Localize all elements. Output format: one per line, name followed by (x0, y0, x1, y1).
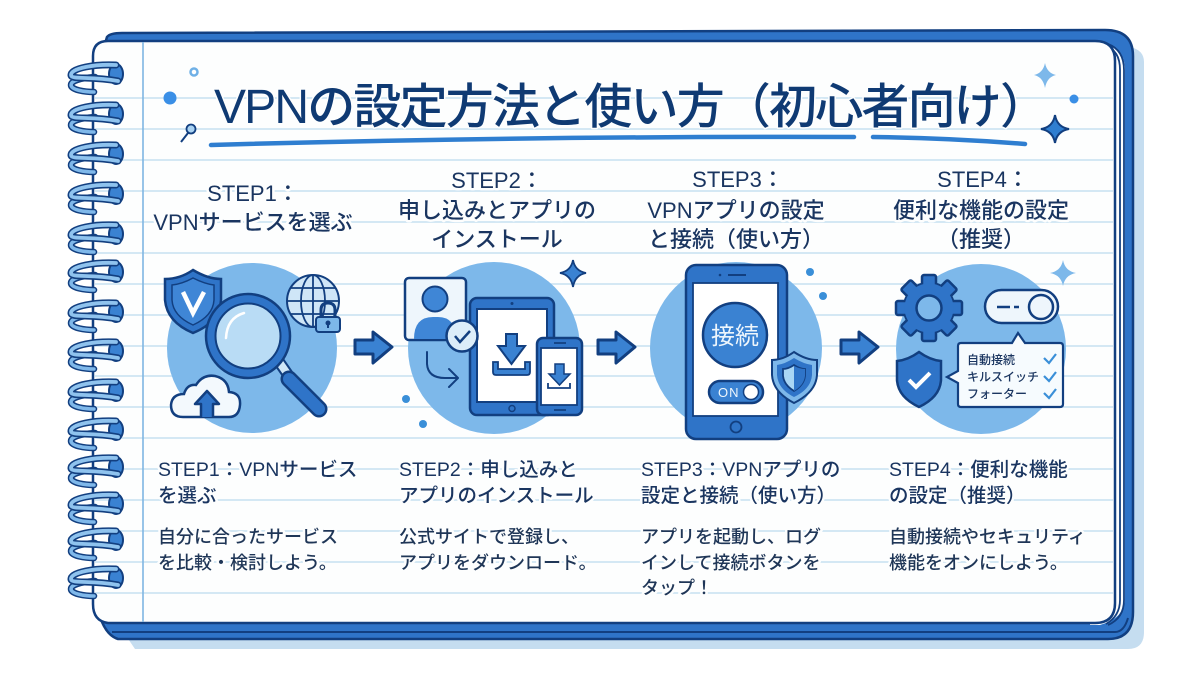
heading: step 4: 便利な機能の設定 (893, 198, 1069, 223)
text: step 4: STEP4：便利な機能 (889, 459, 1068, 481)
heading: step 2 (398, 168, 596, 252)
text: step 4 (889, 459, 1086, 573)
lower cover line (112, 618, 1128, 632)
text: step 2: 公式サイトで登録し、 (399, 527, 579, 547)
icon: gear (896, 275, 962, 341)
callout: feature checklist (947, 333, 1063, 407)
text: step 3: インして接続ボタンを (641, 553, 820, 573)
heading: step 4: （推奨） (937, 227, 1025, 252)
background circle (650, 262, 822, 434)
text: step 4: の設定（推奨） (889, 485, 1026, 507)
title underline (211, 137, 1025, 145)
dots (806, 268, 827, 300)
dots (402, 395, 427, 428)
icon: phone (537, 338, 582, 415)
step 2 illustration (402, 260, 586, 434)
text: step 3: アプリを起動し、ログ (641, 527, 821, 547)
text: step 1 (158, 459, 357, 573)
callout: feature checklist: キルスイッチ (967, 370, 1039, 384)
notebook cover (100, 30, 1133, 639)
margin line (142, 42, 144, 622)
text: step 2 (399, 459, 597, 573)
text: step 3: STEP3：VPNアプリの (641, 459, 840, 481)
text: step 4: 自動接続やセキュリティ (889, 527, 1086, 547)
icon: sparkle (1050, 260, 1076, 286)
icon: upload cloud (171, 376, 240, 417)
spiral binding (71, 64, 123, 596)
icon: user card (405, 278, 478, 352)
ruled lines (95, 98, 1113, 593)
stacked pages (1090, 41, 1125, 625)
step 3 illustration (650, 262, 827, 439)
heading: step 1: STEP1： (207, 181, 299, 206)
callout: feature checklist: フォーター (967, 387, 1027, 401)
background circle (408, 262, 580, 434)
callout: feature checklist: 自動接続 (967, 352, 1015, 367)
background circle (167, 263, 337, 433)
text: step 1: を選ぶ (158, 485, 217, 507)
toggle: ON: ON (718, 385, 740, 400)
title: VPNの設定方法と使い方（初心者向け） (214, 81, 1048, 134)
text: step 3: 設定と接続（使い方） (641, 485, 836, 507)
text: step 2: STEP2：申し込みと (399, 459, 578, 481)
button: connect (703, 303, 767, 367)
heading: step 2: インストール (431, 227, 563, 252)
heading: step 1: VPNサービスを選ぶ (153, 210, 353, 235)
background circle (896, 264, 1066, 434)
toggle (985, 290, 1058, 323)
icon: smartphone (686, 265, 787, 439)
heading: step 3: VPNアプリの設定 (647, 198, 825, 223)
toggle: ON (709, 381, 763, 403)
sparkles right of title (1034, 63, 1078, 143)
heading: step 4: STEP4： (937, 167, 1029, 192)
text: step 3 (641, 459, 840, 598)
text: step 2: アプリのインストール (399, 485, 594, 507)
text: step 1: 自分に合ったサービス (158, 527, 338, 547)
heading: step 2: 申し込みとアプリの (398, 198, 596, 223)
heading: step 3: と接続（使い方） (648, 227, 824, 252)
heading: step 3: STEP3： (692, 167, 784, 192)
icon: sparkle (560, 260, 586, 287)
text: step 3: タップ！ (641, 578, 713, 598)
icon: globe with lock (287, 275, 340, 332)
step 4 illustration (896, 260, 1076, 434)
icon: magnifier (206, 294, 319, 409)
icon: tablet (470, 298, 554, 415)
notebook page (93, 41, 1115, 623)
button: connect: 接続 (711, 323, 759, 350)
heading: step 1 (153, 181, 353, 235)
text: step 1: を比較・検討しよう。 (158, 553, 337, 573)
curved arrow (427, 352, 458, 387)
text: step 2: アプリをダウンロード。 (399, 553, 597, 573)
arrow 1 (355, 332, 392, 363)
heading: step 3 (647, 167, 825, 252)
text: step 4: 機能をオンにしよう。 (889, 553, 1068, 573)
icon: shield (772, 352, 817, 403)
notebook drop shadow (122, 47, 1144, 649)
arrow 3 (841, 332, 878, 363)
icon: shield V (165, 270, 221, 333)
heading: step 4 (893, 167, 1069, 252)
arrow 2 (598, 332, 635, 363)
text: step 1: STEP1：VPNサービス (158, 459, 357, 481)
heading: step 2: STEP2： (451, 168, 543, 193)
icon: shield check (897, 352, 941, 407)
title decorations left (164, 68, 198, 142)
step 1 illustration (165, 263, 340, 433)
